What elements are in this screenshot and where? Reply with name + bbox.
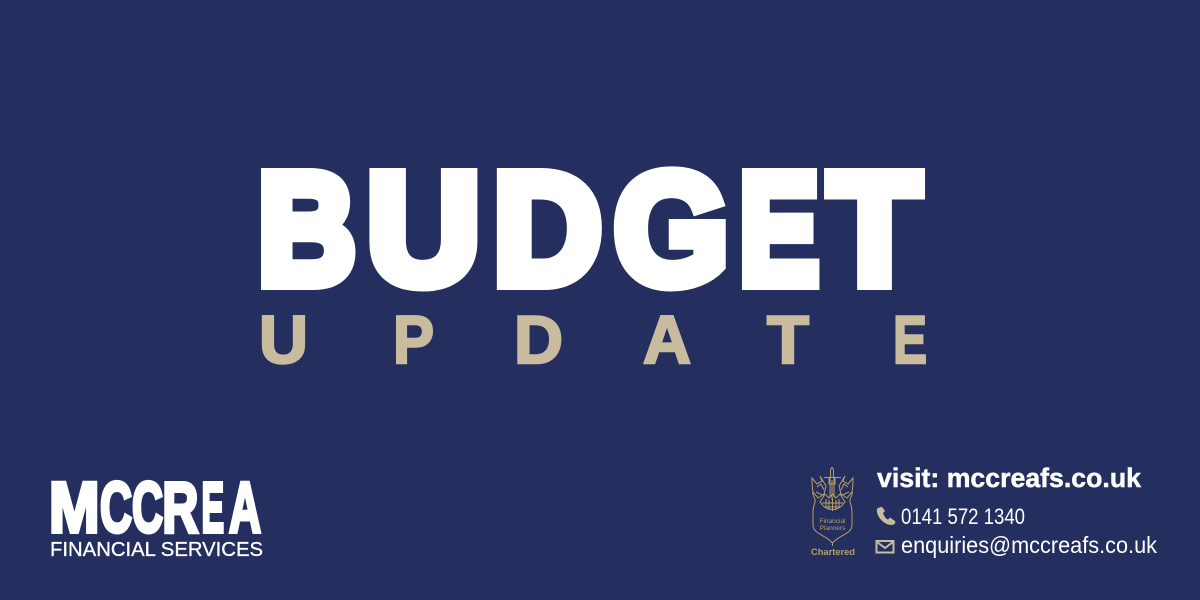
subtitle: UPDATE: T — [767, 302, 809, 378]
subtitle: UPDATE: P — [393, 302, 434, 378]
crest right supporter — [839, 476, 853, 498]
title: BUDGET: G — [614, 142, 728, 317]
phone number: 0141 572 1340 — [901, 504, 1025, 529]
title: BUDGET: E — [739, 142, 819, 317]
email address: enquiries@mccreafs.co.uk — [901, 532, 1157, 558]
title: BUDGET: T — [829, 142, 920, 317]
subtitle: UPDATE: U — [259, 302, 308, 378]
subtitle: UPDATE: D — [514, 302, 563, 378]
title: BUDGET: U — [367, 142, 480, 317]
logo wordmark: C — [100, 469, 132, 548]
crest left supporter — [812, 476, 826, 498]
crest sword — [824, 467, 841, 500]
subtitle: UPDATE: A — [643, 302, 691, 378]
subtitle: UPDATE: E — [893, 302, 927, 378]
logo wordmark: A — [229, 469, 261, 548]
title: BUDGET: D — [494, 142, 602, 317]
logo: McCrea Financial Services — [49, 469, 263, 561]
title: BUDGET — [258, 142, 920, 317]
logo wordmark: E — [202, 469, 224, 548]
crest helm — [820, 494, 845, 511]
logo tagline: FINANCIAL SERVICES — [50, 539, 263, 561]
subtitle: UPDATE — [259, 302, 927, 378]
title: BUDGET: B — [258, 142, 356, 317]
logo wordmark: R — [162, 469, 198, 548]
crest: Chartered Financial Planners — [811, 467, 855, 558]
crest shield — [812, 492, 852, 546]
logo wordmark — [49, 469, 261, 548]
logo wordmark: C — [132, 469, 163, 548]
crest label: Financial — [819, 518, 846, 525]
icon: phone — [877, 507, 895, 525]
logo wordmark: M — [49, 469, 100, 548]
website link: visit: mccreafs.co.uk — [877, 463, 1142, 493]
crest label line two: Planners — [820, 525, 846, 532]
icon: envelope — [876, 541, 894, 552]
crest caption: Chartered — [811, 547, 855, 558]
